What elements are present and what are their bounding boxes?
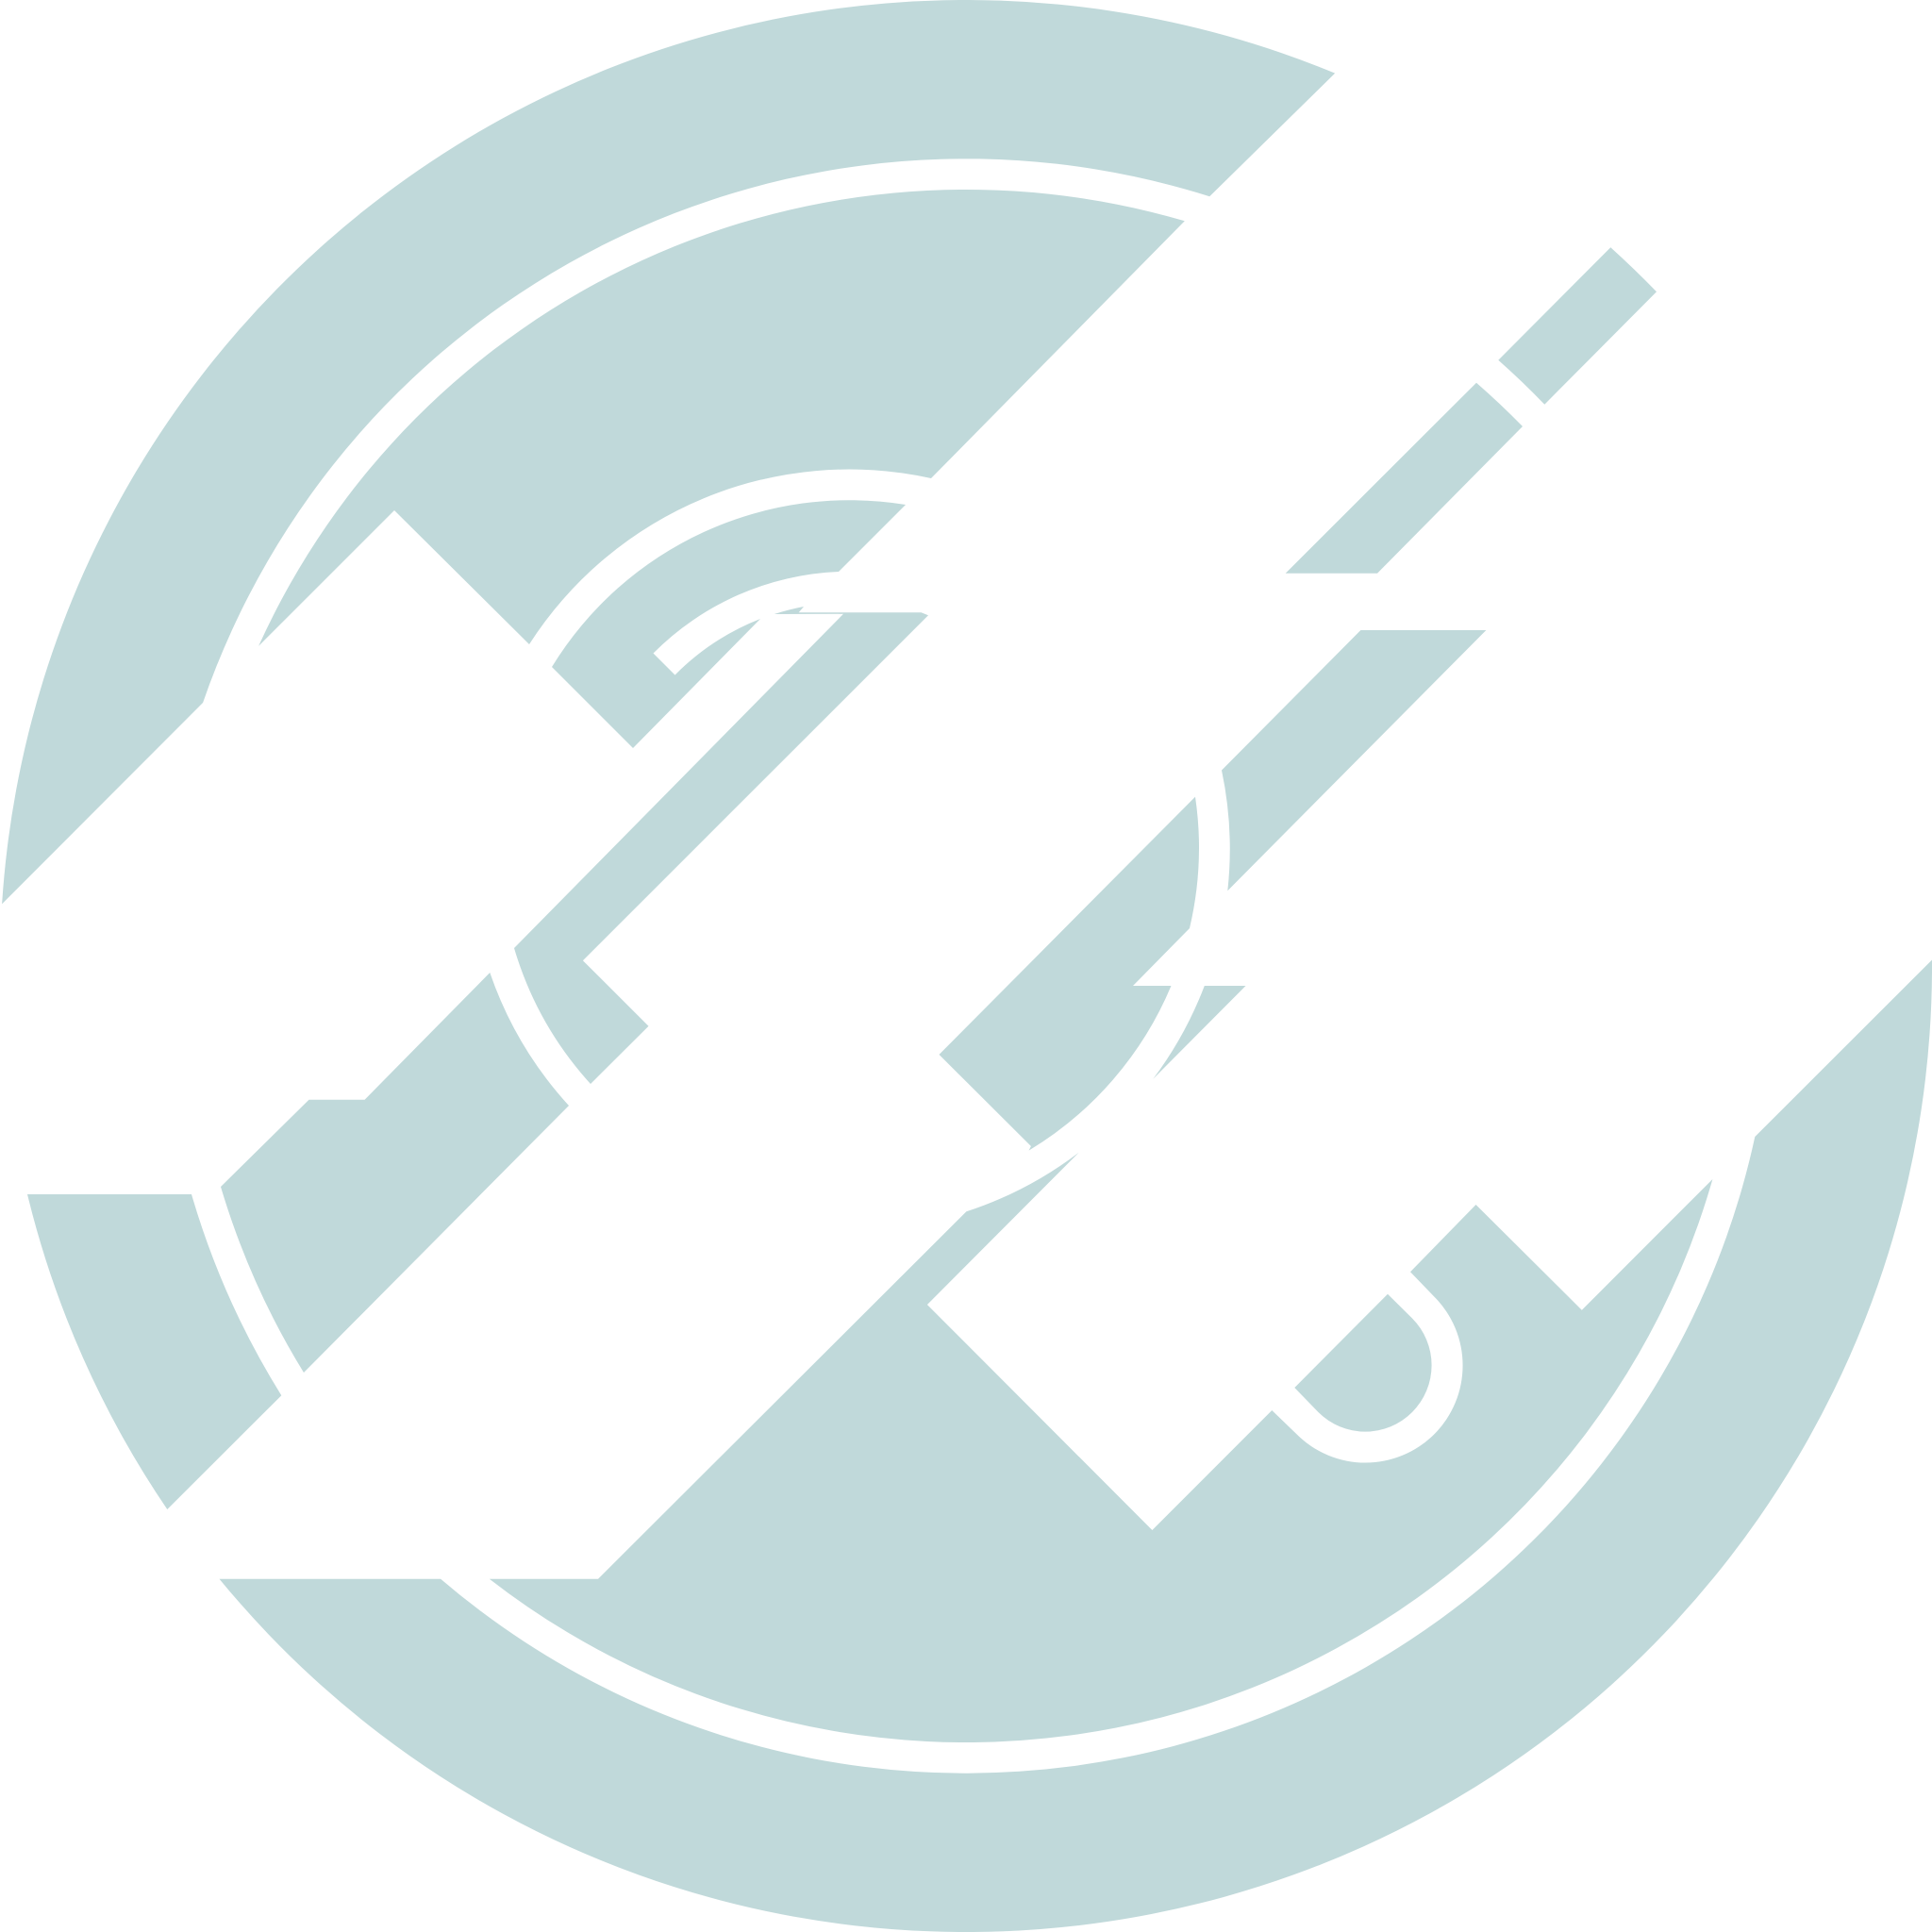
outer ring: top arc segment: [2, 0, 1335, 904]
inner ring: hooked arc segment: [552, 500, 906, 748]
centre band: inner circle segment: [940, 797, 1199, 1151]
bottom inner disc: large zigzag segment with rounded notch: [490, 1153, 1712, 1742]
diagonal stripe: centre-left band: [514, 607, 928, 1084]
second ring: top segment: [258, 190, 1185, 646]
diagonal stripe: right of centre: [1222, 630, 1486, 891]
diagonal stripe: upper-right tip: [1498, 247, 1657, 405]
lower-left band: second ring segment: [221, 973, 569, 1373]
diagonal stripe: upper-right long: [1286, 383, 1523, 574]
outer ring: bottom arc segment: [219, 960, 1932, 1932]
outer ring: left segment: [27, 1194, 281, 1509]
droplet: rounded shape inside notch: [1294, 1294, 1432, 1432]
small wedge: right of centre band: [1153, 986, 1245, 1079]
